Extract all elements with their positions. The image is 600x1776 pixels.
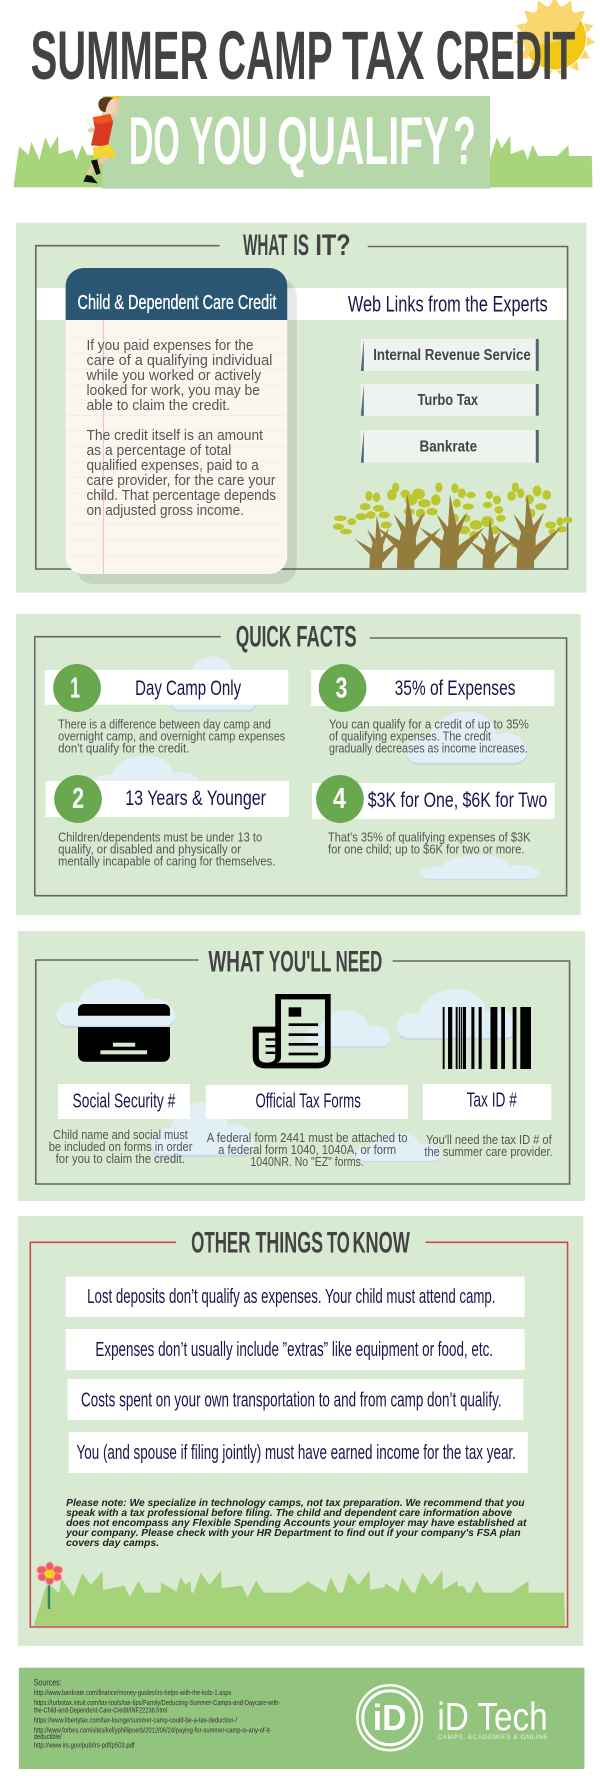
cloud <box>397 989 517 1040</box>
note: does not encompass any Flexible Spending Accounts your employer may have established at <box>66 1518 527 1529</box>
notebook card <box>66 268 287 574</box>
heading: other things to know: TO <box>327 1227 350 1260</box>
sources <box>34 1678 281 1749</box>
card body text: qualified expenses, paid to a <box>86 458 260 474</box>
item: official tax forms: A federal form 2441 must be attached to <box>207 1130 408 1145</box>
card body text: as a percentage of total <box>86 443 231 459</box>
grass left <box>13 136 102 187</box>
panel background <box>16 614 580 915</box>
footer background <box>19 1668 584 1769</box>
fact 1: don't qualify for the credit. <box>58 740 189 755</box>
item: tax id: Tax ID # <box>467 1090 517 1112</box>
card body text: care of a qualifying individual <box>86 353 272 369</box>
logo: iD Tech: CAMPS, ACADEMIES & ONLINE <box>437 1734 548 1741</box>
illustration: trees <box>334 483 572 569</box>
heading: quick facts: QUICK <box>236 621 291 654</box>
card body text <box>86 338 276 519</box>
icon: tax form <box>253 994 331 1068</box>
sources: http://www.bankrate.com/finance/money-guides/irs-helps-with-the-kids-1.aspx <box>34 1690 232 1697</box>
cloud <box>57 979 175 1028</box>
note: speak with a tax professional before filing. The child and dependent care information above <box>66 1508 512 1519</box>
item: official tax forms: 1040NR. No "EZ" forms. <box>250 1154 364 1169</box>
logo: iD Tech <box>357 1685 548 1750</box>
fact 2: Children/dependents must be under 13 to <box>58 829 262 844</box>
title: TAX <box>342 17 424 94</box>
link button: internal revenue service <box>361 339 539 371</box>
item: social security: be included on forms in order <box>49 1139 193 1154</box>
tip 4 <box>69 1432 528 1473</box>
heading: other things to know <box>191 1227 410 1260</box>
fact 1 <box>45 664 288 755</box>
fact 4: for one child; up to $6K for two or more. <box>328 841 524 856</box>
fact 1: overnight camp, and overnight camp expenses <box>58 728 286 743</box>
logo: iD Tech: iD <box>373 1698 407 1738</box>
fact 4 <box>312 775 555 856</box>
panel: other things to know <box>18 1216 583 1646</box>
fact 1: There is a difference between day camp and <box>58 716 271 731</box>
card body text: The credit itself is an amount <box>86 428 263 444</box>
title: SUMMER <box>31 17 208 94</box>
card body text: able to claim the credit. <box>86 398 230 414</box>
panel background <box>18 1216 583 1646</box>
fact 3: You can qualify for a credit of up to 35% <box>329 716 529 731</box>
illustration: grass <box>34 1571 565 1626</box>
card title: Child & Dependent Care Credit <box>78 292 277 314</box>
fact 3: gradually decreases as income increases. <box>329 740 528 755</box>
card shadow <box>76 278 297 584</box>
grass right <box>490 136 593 187</box>
fact 3 <box>311 664 554 755</box>
fact 2 <box>46 775 289 868</box>
title: CAMP <box>218 17 333 94</box>
tip 3 <box>68 1379 523 1420</box>
cloud <box>304 1010 390 1048</box>
cloud <box>90 755 203 797</box>
heading: other things to know: KNOW <box>352 1227 410 1260</box>
footer <box>19 1668 584 1769</box>
heading: other things to know: THINGS <box>255 1227 323 1260</box>
item: social security: Social Security # <box>73 1091 175 1113</box>
fact 2: 13 Years & Younger <box>125 787 266 810</box>
heading: what you'll need <box>208 946 382 979</box>
item: tax id: the summer care provider. <box>424 1144 553 1159</box>
cloud <box>406 711 527 765</box>
card body text: looked for work, you may be <box>86 383 260 399</box>
sources: the-Child-and-Dependent-Care-Credit/INF22238.html <box>34 1708 167 1715</box>
subtitle: YOU <box>189 104 268 179</box>
note: covers day camps. <box>66 1538 159 1549</box>
note <box>65 1498 527 1549</box>
sources: http://www.forbes.com/sites/kellyphillipserb/2012/06/24/paying-for-summer-camp-is-any-of-it- <box>34 1727 272 1734</box>
icon: sun <box>513 0 596 80</box>
panel background <box>16 223 586 593</box>
subtitle banner <box>102 96 490 189</box>
heading: what you'll need: WHAT <box>208 946 264 979</box>
item: social security: Child name and social must <box>53 1127 188 1142</box>
logo: iD Tech: iD Tech <box>437 1696 548 1739</box>
subtitle: ? <box>453 104 476 179</box>
fact 3: 3 <box>335 673 347 705</box>
item: social security <box>49 1084 193 1166</box>
panel: what is it <box>16 223 586 593</box>
fact 4: That's 35% of qualifying expenses of $3K <box>328 829 531 844</box>
item: official tax forms <box>206 1085 408 1169</box>
fact 1: Day Camp Only <box>135 677 242 700</box>
fact 4: 4 <box>333 783 346 815</box>
fact 4: $3K for One, $6K for Two <box>368 789 547 812</box>
icon: barcode <box>443 1007 531 1069</box>
icon: card <box>78 1004 170 1062</box>
item: official tax forms: Official Tax Forms <box>255 1091 361 1113</box>
tip 2 <box>66 1329 525 1370</box>
card body text: care provider, for the care your <box>86 473 276 489</box>
item: official tax forms: a federal form 1040, 1040A, or form <box>218 1142 396 1157</box>
sources: https://turbotax.intuit.com/tax-tools/tax-tips/Family/Deducting-Summer-Camps-and-Daycare-with- <box>34 1700 281 1707</box>
fact 2: mentally incapable of caring for themselves. <box>58 853 275 868</box>
panel: quick facts <box>16 614 580 915</box>
sources: https://www.libertytax.com/tax-lounge/summer-camp-could-be-a-tax-deduction-/ <box>34 1718 237 1725</box>
heading: what you'll need: NEED <box>336 946 382 979</box>
link button: internal revenue service: Internal Revenue Service <box>373 347 531 364</box>
heading: other things to know: OTHER <box>191 1227 250 1260</box>
cloud <box>419 855 540 880</box>
fact 2: qualify, or disabled and physically or <box>58 841 242 856</box>
subtitle: QUALIFY <box>277 104 449 179</box>
panel: what you'll need <box>18 931 585 1201</box>
sources: deductible/ <box>34 1734 62 1741</box>
sources: http://www.irs.gov/pub/irs-pdf/p503.pdf <box>34 1742 135 1749</box>
heading: what is it: IS <box>293 229 309 262</box>
item: tax id: You'll need the tax ID # of <box>426 1132 552 1147</box>
header <box>13 0 596 189</box>
cloud <box>170 656 257 712</box>
link button: turbo tax <box>361 384 539 416</box>
card body text: while you worked or actively <box>86 368 262 384</box>
card body text: on adjusted gross income. <box>86 503 244 519</box>
heading: what is it: IT? <box>315 229 351 262</box>
title <box>31 17 575 94</box>
subtitle <box>129 104 476 179</box>
fact 2: 2 <box>72 783 84 815</box>
icon: running child <box>83 96 119 183</box>
subtitle: DO <box>129 104 180 179</box>
cloud <box>354 1132 442 1162</box>
heading: what is it: WHAT <box>243 229 287 262</box>
card body text: If you paid expenses for the <box>86 338 253 354</box>
note: your company. Please check with your HR Department to find out if your company's FSA plan <box>65 1528 521 1539</box>
item: social security: for you to claim the credit. <box>56 1151 185 1166</box>
cloud <box>152 1102 255 1157</box>
link button: turbo tax: Turbo Tax <box>417 392 478 409</box>
heading: what you'll need: YOU'LL <box>269 946 331 979</box>
sources: Sources: <box>34 1678 62 1689</box>
link button: bankrate <box>361 430 539 463</box>
link button: bankrate: Bankrate <box>419 439 477 456</box>
note: Please note: We specialize in technology camps, not tax preparation. We recommend that you <box>66 1498 525 1509</box>
panel background <box>18 931 585 1201</box>
heading: quick facts: FACTS <box>296 621 357 654</box>
card body text: child. That percentage depends <box>86 488 276 504</box>
tip 1 <box>66 1277 525 1317</box>
item: tax id <box>423 1084 553 1159</box>
fact 1: 1 <box>70 673 80 705</box>
icon: flower <box>37 1562 63 1609</box>
fact 3: of qualifying expenses. The credit <box>329 728 491 743</box>
fact 3: 35% of Expenses <box>395 677 515 700</box>
